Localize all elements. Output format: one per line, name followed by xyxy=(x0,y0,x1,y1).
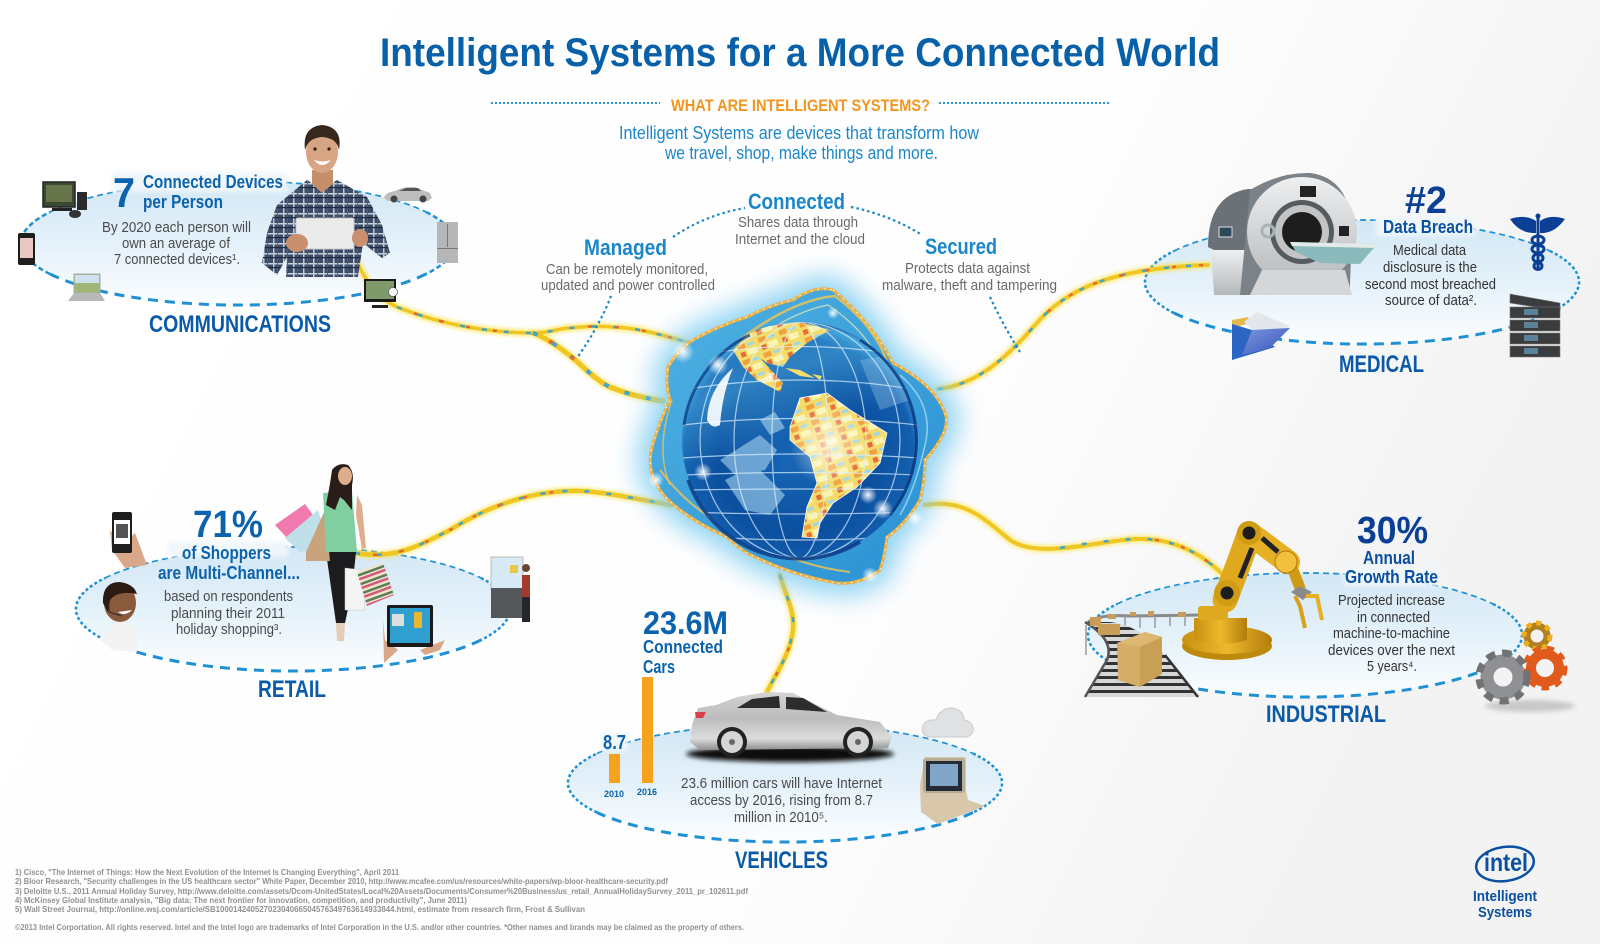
medical body text: disclosure is the xyxy=(1383,260,1477,276)
upper ocean sheen xyxy=(682,322,890,464)
intel intelligent systems logo xyxy=(1473,843,1537,921)
ribbon core xyxy=(355,262,1228,692)
footnotes xyxy=(15,867,748,932)
stat 23.6M connected cars: Cars xyxy=(643,657,675,677)
bar chart: connected cars xyxy=(603,677,657,800)
device: phone xyxy=(18,233,35,265)
MRI table xyxy=(1290,242,1378,264)
sphere xyxy=(682,322,918,558)
globe xyxy=(648,289,946,583)
attribute: managed xyxy=(541,235,715,294)
tablet xyxy=(296,218,354,249)
icon: kiosk with person xyxy=(491,557,530,622)
stat 7 connected devices: Connected Devices xyxy=(143,172,283,192)
attribute: secured xyxy=(882,234,1057,294)
stat 30% growth: 30% xyxy=(1357,510,1428,552)
icon: seat-back screen xyxy=(920,757,985,824)
panel: communications xyxy=(18,125,458,338)
retail body text: holiday shopping³. xyxy=(176,622,282,638)
stat 71% of shoppers: 71% xyxy=(193,504,263,546)
stat #2 data breach: Data Breach xyxy=(1383,217,1473,237)
medical body text: Medical data xyxy=(1393,243,1467,259)
blue bag xyxy=(285,510,330,552)
icon: server rack xyxy=(1510,294,1560,357)
caribbean islands xyxy=(785,368,822,380)
medical body text: second most breached xyxy=(1365,277,1496,293)
pale landmasses xyxy=(720,355,910,515)
stat 7 connected devices: 7 xyxy=(113,169,135,216)
stat 71% of shoppers: are Multi-Channel... xyxy=(158,563,300,583)
panel: industrial ellipse xyxy=(1088,573,1522,697)
globe glow xyxy=(650,289,946,583)
device: game console xyxy=(43,182,87,218)
intro text: we travel, shop, make things and more. xyxy=(664,143,938,163)
stat 71% of shoppers xyxy=(158,504,300,583)
medical label: MEDICAL xyxy=(1339,351,1424,378)
attribute: secured: Protects data against xyxy=(905,261,1030,277)
white bag xyxy=(345,568,365,610)
attribute: secured: malware, theft and tampering xyxy=(882,278,1057,294)
retail label: RETAIL xyxy=(258,676,326,703)
footnotes: 3) Deloitte U.S., 2011 Annual Holiday Survey, http://www.deloitte.com/assets/Dcom-UnitedStates/Local%20Assets/Documents/Consumer%20Business/us_retail_AnnualHolidaySurvey_2011_pr_102611.pdf xyxy=(15,886,748,896)
footnotes: 5) Wall Street Journal, http://online.wsj.com/article/SB10001424052702304066504576349763614933844.html, estimate from research firm, Frost & Sullivan xyxy=(15,904,585,914)
cardboard box xyxy=(1117,632,1162,687)
striped bag xyxy=(357,563,394,606)
device: fridge xyxy=(437,222,458,263)
tan bag xyxy=(306,510,330,561)
stat 30% growth: Growth Rate xyxy=(1345,567,1438,587)
vehicles body text: 23.6 million cars will have Internet xyxy=(681,776,882,792)
panel: medical ellipse xyxy=(1145,220,1579,344)
vehicles body text: million in 2010⁵. xyxy=(734,810,828,826)
intro: what are intelligent systems xyxy=(491,97,1109,163)
industrial body text: Projected increase xyxy=(1338,593,1445,609)
icon: cloud xyxy=(922,708,973,737)
industrial body text: in connected xyxy=(1357,610,1430,626)
icon: hand with QR phone xyxy=(110,512,147,568)
intel intelligent systems logo: intel xyxy=(1484,849,1528,877)
gripper xyxy=(1291,586,1312,600)
footnotes: 2) Bloor Research, "Security challenges in the US healthcare sector" White Paper, December 2010, http://www.mcafee.com/us/resources/white-papers/wp-bloor-healthcare-security.pdf xyxy=(15,876,668,886)
vehicles body text: access by 2016, rising from 8.7 xyxy=(690,793,873,809)
panel: vehicles xyxy=(603,605,985,874)
grid lines xyxy=(682,322,918,558)
communications label: COMMUNICATIONS xyxy=(149,311,331,338)
panel: retail ellipse xyxy=(76,547,510,671)
communications body text: 7 connected devices¹. xyxy=(114,252,240,268)
stat #2 data breach xyxy=(1383,180,1473,237)
stat 30% growth xyxy=(1345,510,1438,587)
intel intelligent systems logo: Systems xyxy=(1478,904,1532,921)
swirl ring xyxy=(650,289,946,583)
device: television xyxy=(364,279,398,308)
intel intelligent systems logo: Intelligent xyxy=(1473,888,1537,905)
ribbons: data streams to globe xyxy=(355,262,1228,692)
industrial body text: devices over the next xyxy=(1328,643,1455,659)
retail body text: based on respondents xyxy=(164,589,293,605)
stat 7 connected devices xyxy=(113,169,283,216)
device: laptop xyxy=(68,274,105,301)
industrial body text: 5 years⁴. xyxy=(1367,659,1417,675)
stat 23.6M connected cars: Connected xyxy=(643,637,723,657)
attribute: connected xyxy=(735,189,865,248)
conveyor belt xyxy=(1085,611,1200,697)
attribute: connected: Internet and the cloud xyxy=(735,232,865,248)
person with tablet xyxy=(262,125,390,277)
north and central america xyxy=(733,322,830,392)
vehicles label: VEHICLES xyxy=(735,847,828,874)
icon: folder xyxy=(1232,312,1290,360)
panel: vehicles ellipse xyxy=(568,724,1002,842)
bar chart: connected cars: 2010 xyxy=(604,789,624,800)
stat 30% growth: Annual xyxy=(1363,548,1415,568)
crescent highlight xyxy=(707,368,733,427)
robot arm xyxy=(1182,521,1322,660)
footnotes: ©2013 Intel Corportation. All rights reserved. Intel and the Intel logo are trademarks of Intel Corporation in the U.S. and/or other countries. *Other names and brands may be claimed as the property of others. xyxy=(15,922,744,932)
device: car xyxy=(384,187,432,202)
bar chart: connected cars: 8.7 xyxy=(603,732,626,754)
stat 23.6M connected cars: 23.6M xyxy=(643,605,728,641)
communications body text: By 2020 each person will xyxy=(102,220,251,236)
industrial label: INDUSTRIAL xyxy=(1266,701,1386,728)
panel: industrial xyxy=(1085,510,1575,728)
panel: retail xyxy=(100,464,530,703)
stat 7 connected devices: per Person xyxy=(143,192,223,212)
attribute: managed: Managed xyxy=(584,235,667,260)
stat 23.6M connected cars xyxy=(643,605,728,677)
dotted connectors between attributes xyxy=(577,207,1020,358)
panel: communications ellipse xyxy=(21,181,455,305)
text halos hiding ellipse outline xyxy=(112,172,1476,751)
south america xyxy=(790,393,887,538)
attribute: connected: Connected xyxy=(748,189,845,214)
icon: tablet in hands xyxy=(383,605,445,663)
icon: call center agent xyxy=(100,582,137,652)
industrial body text: machine-to-machine xyxy=(1333,626,1450,642)
sparkles xyxy=(648,307,923,583)
retail body text: planning their 2011 xyxy=(171,606,285,622)
pink bag xyxy=(275,504,318,538)
footnotes: 4) McKinsey Global Institute analysis, "Big data: The next frontier for innovation, competition, and productivity", June 2011) xyxy=(15,895,467,905)
intro text: Intelligent Systems are devices that transform how xyxy=(619,123,980,143)
ribbon colour flecks xyxy=(355,265,1228,692)
car xyxy=(686,692,894,762)
attribute: managed: Can be remotely monitored, xyxy=(546,262,708,278)
ribbon glow xyxy=(355,262,1228,692)
bar chart: connected cars: 2016 xyxy=(637,787,657,798)
medical body text: source of data². xyxy=(1385,293,1477,309)
attribute: managed: updated and power controlled xyxy=(541,278,715,294)
attribute: secured: Secured xyxy=(925,234,997,259)
south america highlight xyxy=(792,406,862,484)
intro heading: WHAT ARE INTELLIGENT SYSTEMS? xyxy=(671,97,930,115)
attribute: connected: Shares data through xyxy=(738,215,858,231)
woman with shopping bags xyxy=(275,464,394,641)
rim line xyxy=(860,340,916,515)
stat 71% of shoppers: of Shoppers xyxy=(182,543,271,563)
MRI scanner xyxy=(1208,173,1378,295)
icon: caduceus xyxy=(1510,214,1565,270)
communications body text: own an average of xyxy=(122,236,231,252)
footnotes: 1) Cisco, "The Internet of Things: How the Next Evolution of the Internet Is Changing Everything", April 2011 xyxy=(15,867,399,877)
title: Intelligent Systems for a More Connected World xyxy=(380,31,1220,75)
panel: medical xyxy=(1208,173,1565,378)
icon: gears xyxy=(1479,623,1575,712)
stat #2 data breach: #2 xyxy=(1405,180,1447,222)
